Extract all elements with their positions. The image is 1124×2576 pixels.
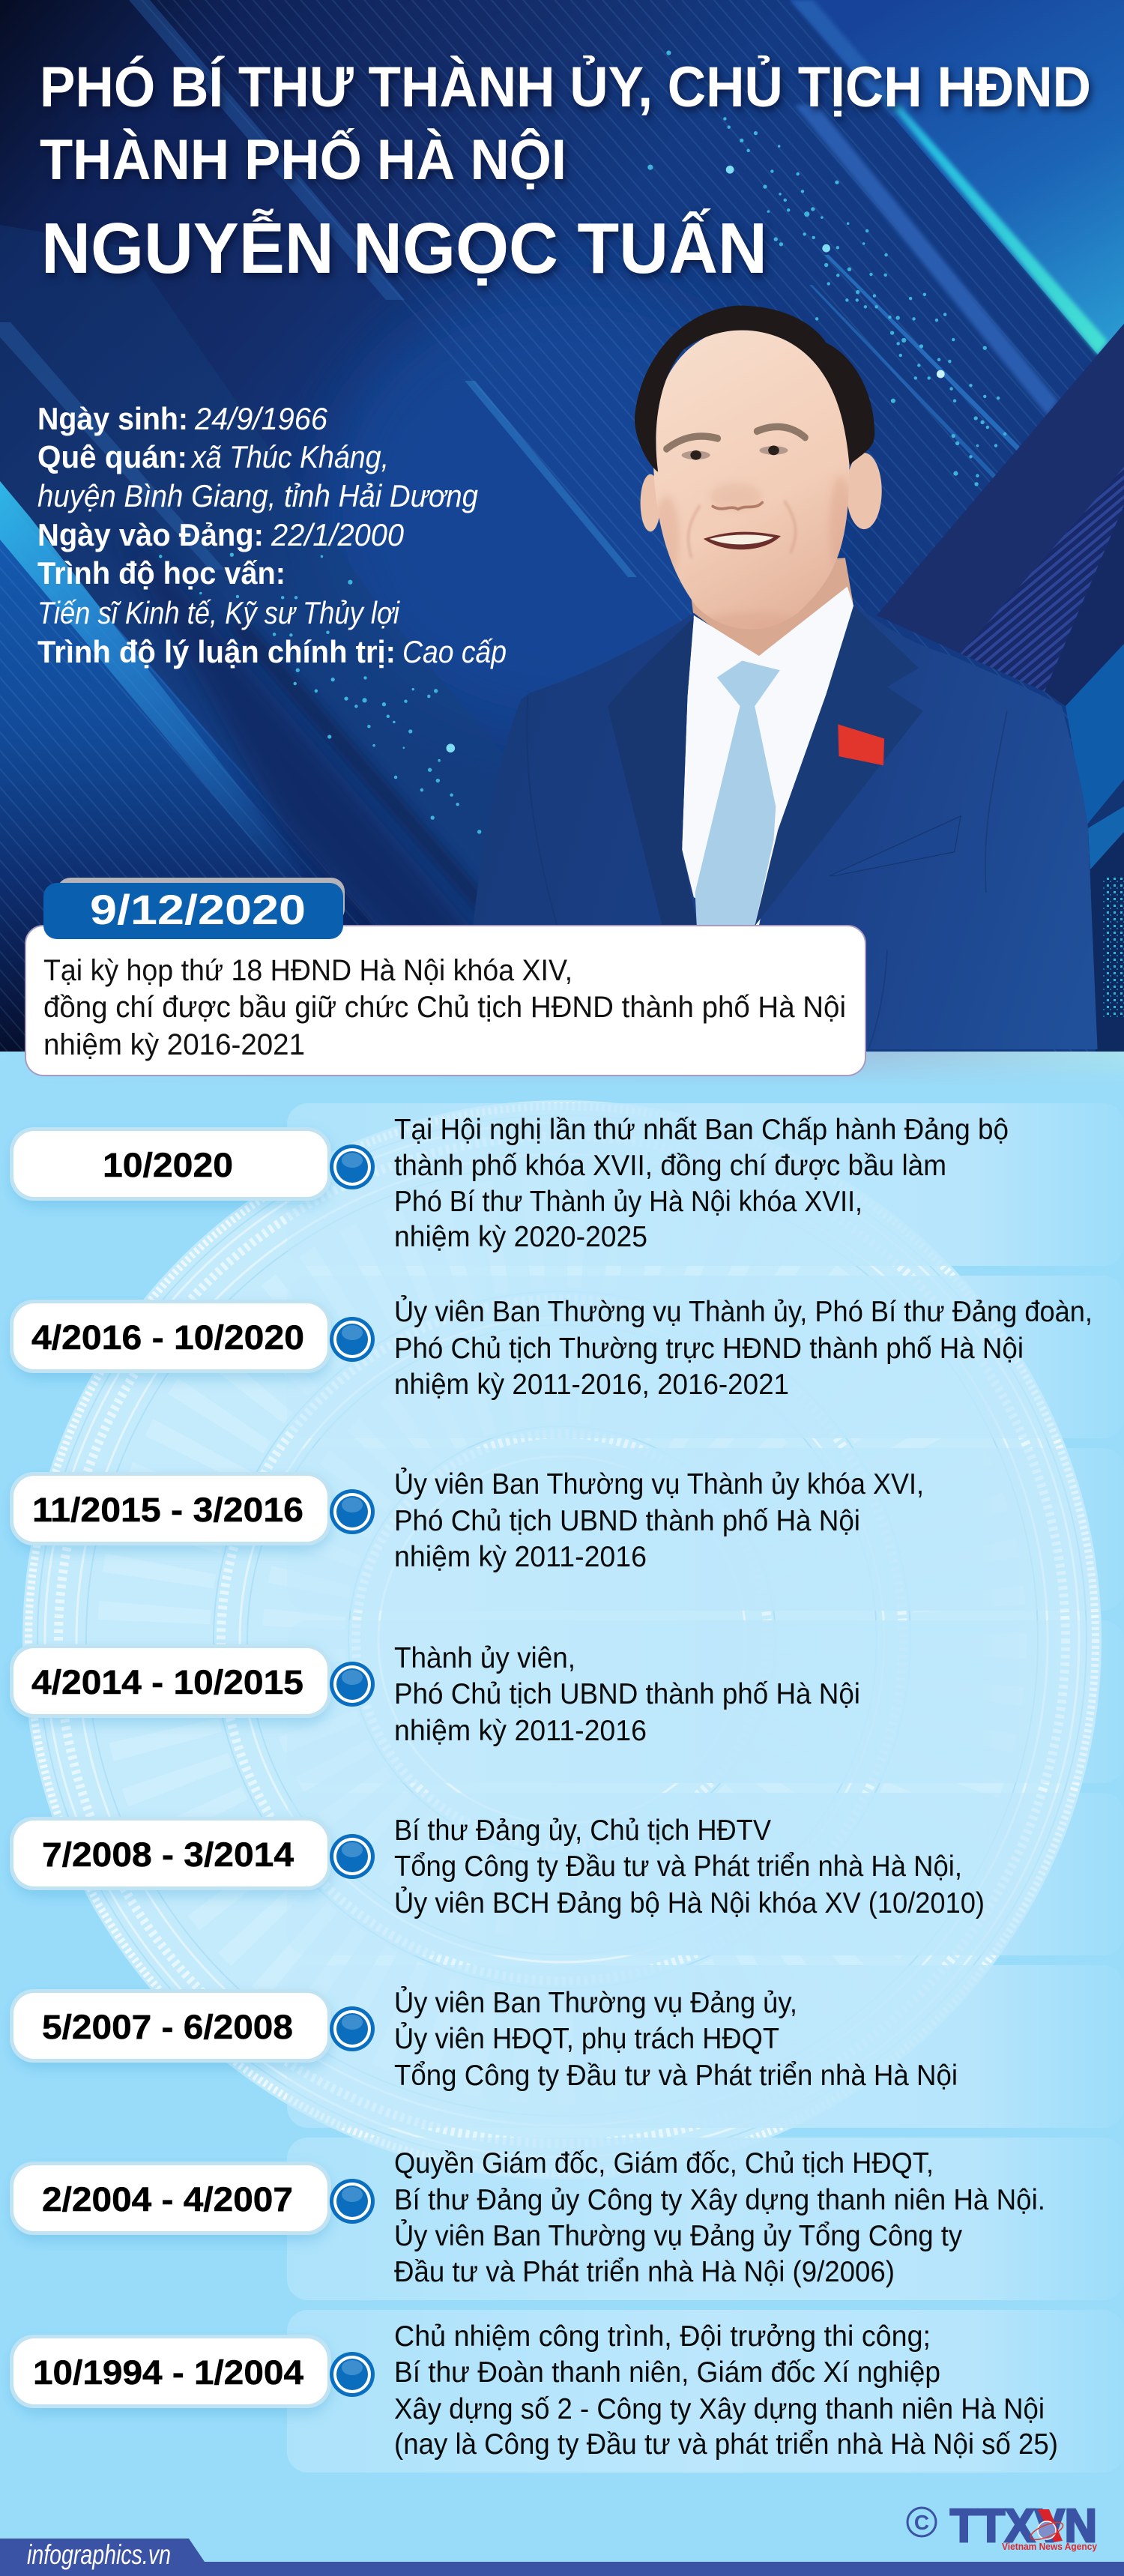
entry text: thành phố khóa XVII, đồng chí được bầu làm: [394, 1150, 946, 1182]
background panel: [287, 1793, 1124, 1955]
portrait: hair: [635, 306, 874, 472]
entry text: Phó Chủ tịch UBND thành phố Hà Nội: [394, 1678, 860, 1710]
background panel: [287, 1965, 1124, 2128]
timeline node: [330, 1489, 375, 1534]
background panel: [287, 1276, 1124, 1438]
party entry date: Ngày vào Đảng:: [37, 517, 264, 552]
timeline node: [330, 2006, 375, 2051]
entry text: [394, 1295, 1093, 1401]
entry text: Ủy viên Ban Thường vụ Thành ủy, Phó Bí thư Đảng đoàn,: [394, 1295, 1093, 1328]
date pill: [10, 1817, 331, 1896]
portrait: left lapel: [608, 618, 697, 926]
date pill: [10, 2162, 331, 2241]
portrait: suit jacket: [465, 603, 1098, 1049]
timeline entry 4/2016 - 10/2020: [10, 1276, 1124, 1438]
timeline entry 7/2008 - 3/2014: [10, 1793, 1124, 1955]
entry text: Phó Chủ tịch UBND thành phố Hà Nội: [394, 1505, 860, 1537]
starry particles lower left: [159, 552, 481, 833]
birth date: Ngày sinh:: [37, 401, 188, 436]
TTXVN logo: [907, 2500, 1098, 2552]
entry text: Bí thư Đoàn thanh niên, Giám đốc Xí nghiệp: [394, 2356, 940, 2389]
date pill: 10/2020: [103, 1146, 233, 1184]
timeline entry 10/1994 - 1/2004: [10, 2310, 1124, 2473]
timeline entry 4/2014 - 10/2015: [10, 1620, 1124, 1783]
portrait: neck: [687, 558, 853, 663]
portrait: jacket pocket: [830, 816, 961, 876]
background panel: [287, 1448, 1124, 1611]
summary box: [25, 926, 865, 1076]
timeline node: [330, 1662, 375, 1707]
date pill: [10, 1127, 331, 1207]
date tab label: 9/12/2020: [90, 886, 306, 933]
timeline entry 5/2007 - 6/2008: [10, 1965, 1124, 2128]
date pill: [10, 1472, 331, 1551]
portrait: mouth: [704, 532, 781, 549]
date pill: [10, 2335, 331, 2414]
entry text: Đầu tư và Phát triển nhà Hà Nội (9/2006): [394, 2256, 895, 2288]
copyright mark: [907, 2508, 936, 2536]
entry text: Ủy viên Ban Thường vụ Thành ủy khóa XVI,: [394, 1468, 924, 1500]
date pill: [10, 1989, 331, 2069]
entry text: Tổng Công ty Đầu tư và Phát triển nhà Hà Nội,: [394, 1850, 962, 1883]
date pill: 2/2004 - 4/2007: [42, 2180, 293, 2218]
entry text: nhiệm kỳ 2020-2025: [394, 1221, 647, 1253]
date pill: 11/2015 - 3/2016: [32, 1491, 303, 1529]
title: [40, 55, 1091, 289]
date pill: 10/1994 - 1/2004: [33, 2353, 303, 2392]
entry text: Bí thư Đảng ủy Công ty Xây dựng thanh niên Hà Nội.: [394, 2184, 1045, 2216]
footer band: [0, 2539, 1124, 2576]
agency name: Vietnam News Agency: [1002, 2541, 1098, 2552]
timeline node: [330, 2352, 375, 2397]
date pill: [10, 1644, 331, 1724]
entry text: [394, 1468, 924, 1573]
entry text: Thành ủy viên,: [394, 1642, 575, 1674]
political theory level: Cao cấp: [402, 634, 507, 669]
timeline node: [330, 1317, 375, 1362]
portrait: tie: [695, 661, 780, 926]
highlight: date tab and summary: [25, 878, 865, 1076]
political theory level: Trình độ lý luận chính trị:: [37, 634, 396, 669]
entry text: Chủ nhiệm công trình, Đội trưởng thi công;: [394, 2320, 931, 2353]
summary text: đồng chí được bầu giữ chức Chủ tịch HĐND thành phố Hà Nội: [43, 991, 846, 1024]
portrait: eyes: [682, 446, 788, 460]
portrait: eyebrows: [666, 426, 806, 449]
timeline entry 11/2015 - 3/2016: [10, 1448, 1124, 1611]
portrait: face: [653, 325, 849, 629]
portrait: right lapel: [755, 606, 923, 926]
background panel: [287, 1620, 1124, 1783]
birth date: 24/9/1966: [194, 401, 328, 436]
background panel: [287, 1103, 1124, 1266]
portrait: sleeve folds: [527, 696, 1007, 1049]
entry text: nhiệm kỳ 2011-2016: [394, 1541, 647, 1573]
background panel: [287, 2138, 1124, 2300]
date pill: 4/2014 - 10/2015: [31, 1663, 303, 1701]
portrait: party badge: [838, 724, 884, 765]
title line 2: THÀNH PHỐ HÀ NỘI: [40, 128, 566, 192]
summary text: Tại kỳ họp thứ 18 HĐND Hà Nội khóa XIV,: [43, 954, 572, 987]
portrait: teeth: [710, 534, 773, 544]
entry text: [394, 1986, 958, 2092]
entry text: Quyền Giám đốc, Giám đốc, Chủ tịch HĐQT,: [394, 2147, 934, 2180]
entry text: Phó Bí thư Thành ủy Hà Nội khóa XVII,: [394, 1186, 862, 1218]
birth date: [37, 401, 328, 436]
date pill: 5/2007 - 6/2008: [42, 2008, 293, 2046]
bronze drum watermark: [22, 1100, 1102, 2180]
timeline node: [330, 2179, 375, 2224]
hometown: huyện Bình Giang, tỉnh Hải Dương: [37, 478, 478, 513]
entry text: nhiệm kỳ 2011-2016: [394, 1715, 647, 1747]
date tab backing: [57, 878, 345, 923]
portrait: smile lines: [688, 501, 796, 558]
hometown: [37, 439, 478, 513]
entry text: Ủy viên Ban Thường vụ Đảng ủy,: [394, 1986, 797, 2019]
entry text: [394, 1642, 860, 1747]
hometown: xã Thúc Kháng,: [190, 439, 389, 474]
footer: [0, 2539, 1124, 2576]
red V stroke: [1038, 2509, 1063, 2542]
globe emblem: [1029, 2519, 1065, 2543]
panel: hero background: [0, 0, 1124, 1052]
entry text: Phó Chủ tịch Thường trực HĐND thành phố Hà Nội: [394, 1333, 1024, 1365]
starry particles upper right: [647, 50, 1006, 486]
entry text: [394, 1815, 985, 1919]
entry text: Xây dựng số 2 - Công ty Xây dựng thanh niên Hà Nội: [394, 2393, 1045, 2425]
timeline node: [330, 1144, 375, 1189]
timeline node: [330, 1834, 375, 1879]
portrait: ears: [641, 453, 882, 531]
person name: NGUYỄN NGỌC TUẤN: [41, 208, 767, 289]
entry text: Tại Hội nghị lần thứ nhất Ban Chấp hành Đảng bộ: [394, 1114, 1009, 1146]
timeline entry 2/2004 - 4/2007: [10, 2138, 1124, 2300]
entry text: Ủy viên Ban Thường vụ Đảng ủy Tổng Công ty: [394, 2219, 962, 2252]
background panel: [287, 2310, 1124, 2473]
copyright mark: C: [914, 2511, 929, 2534]
entry text: (nay là Công ty Đầu tư và phát triển nhà Hà Nội số 25): [394, 2428, 1058, 2461]
entry text: nhiệm kỳ 2011-2016, 2016-2021: [394, 1369, 789, 1401]
summary text: [43, 954, 846, 1061]
entry text: Tổng Công ty Đầu tư và Phát triển nhà Hà Nội: [394, 2060, 958, 2092]
education: [37, 555, 400, 630]
hometown: Quê quán:: [37, 439, 187, 474]
timeline entry 10/2020: [10, 1103, 1124, 1266]
lower band shading: [665, 1052, 1124, 1078]
entry text: Bí thư Đảng ủy, Chủ tịch HĐTV: [394, 1815, 771, 1847]
entry text: Ủy viên BCH Đảng bộ Hà Nội khóa XV (10/2010): [394, 1886, 985, 1919]
entry text: [394, 1114, 1009, 1253]
portrait: nose: [710, 483, 762, 511]
party entry date: [37, 517, 405, 552]
portrait of Nguyễn Ngọc Tuấn: [465, 306, 1098, 1049]
date pill: 4/2016 - 10/2020: [31, 1318, 304, 1357]
date tab: [43, 883, 343, 939]
education: Trình độ học vấn:: [37, 555, 285, 591]
party entry date: 22/1/2000: [271, 517, 405, 552]
date pill: [10, 1300, 331, 1379]
summary text: nhiệm kỳ 2016-2021: [43, 1028, 305, 1061]
education: Tiến sĩ Kinh tế, Kỹ sư Thủy lợi: [37, 595, 400, 630]
personal details: [37, 401, 507, 669]
entry text: Ủy viên HĐQT, phụ trách HĐQT: [394, 2022, 779, 2055]
date pill: 7/2008 - 3/2014: [42, 1836, 294, 1874]
footer site name: infographics.vn: [27, 2539, 171, 2570]
portrait: shirt: [682, 587, 853, 926]
entry text: [394, 2147, 1045, 2288]
entry text: [394, 2320, 1058, 2461]
agency letters: TTXVN: [950, 2500, 1097, 2552]
portrait: cheek shading: [654, 477, 853, 637]
